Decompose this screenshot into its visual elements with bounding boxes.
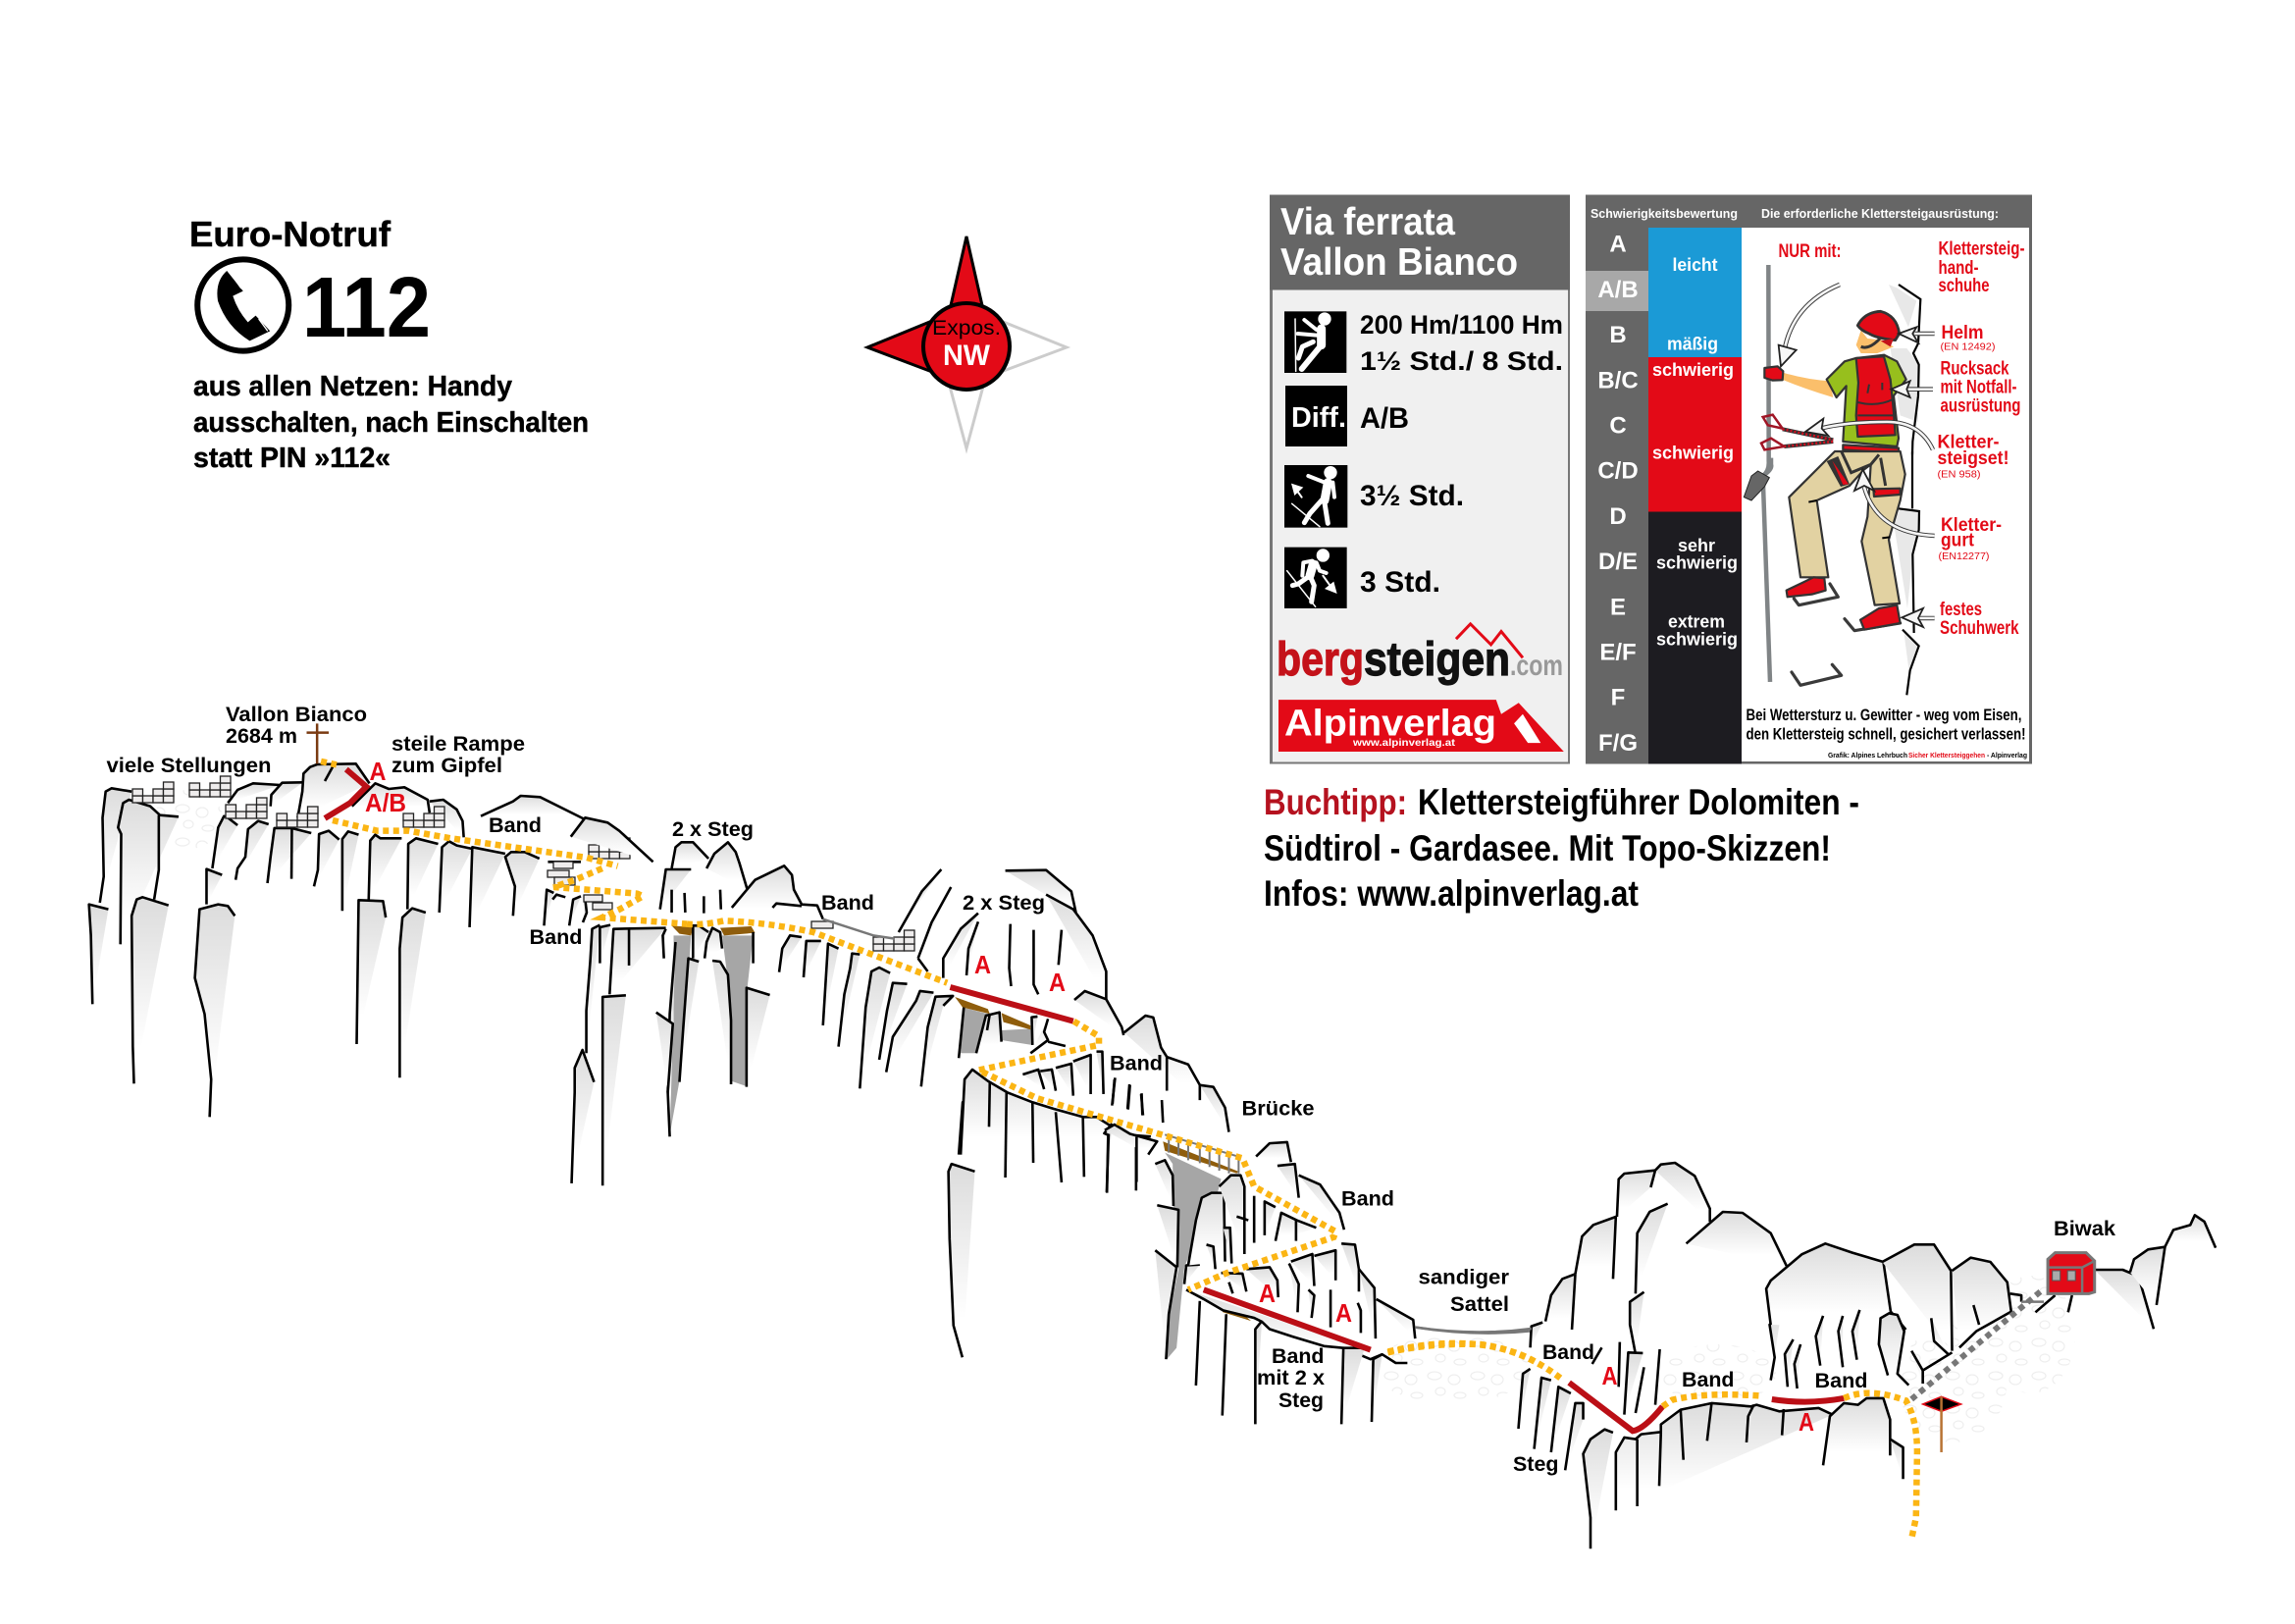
equipment labels: gurt bbox=[1941, 531, 1975, 551]
equipment labels: (EN 958) bbox=[1937, 470, 1980, 481]
safety note bbox=[1747, 706, 2025, 743]
difficulty band labels: mäßig bbox=[1667, 334, 1718, 353]
icon: telephone bbox=[197, 259, 288, 351]
panel title: Vallon Bianco bbox=[1280, 241, 1518, 284]
route labels: Band bbox=[489, 814, 542, 837]
grade letters: F/G bbox=[1598, 730, 1638, 757]
approach time: 3½ Std. bbox=[1360, 480, 1464, 512]
rock outlines bbox=[1519, 1163, 2216, 1548]
grade letters: A/B bbox=[1597, 277, 1639, 303]
summit cross bbox=[306, 723, 329, 763]
difficulty markers on route: A bbox=[1799, 1407, 1814, 1437]
book tip: Buchtipp: bbox=[1264, 782, 1407, 822]
icon: ascent bbox=[1284, 465, 1347, 528]
equipment labels: ausrüstung bbox=[1941, 396, 2021, 417]
logo: Alpinverlag bbox=[1278, 700, 1564, 752]
difficulty markers on route: A bbox=[369, 757, 387, 786]
route labels bbox=[106, 704, 2115, 1476]
logo: Alpinverlag: www.alpinverlag.at bbox=[1352, 738, 1456, 749]
difficulty markers on route: A bbox=[1049, 968, 1066, 997]
dark chasms bbox=[668, 935, 1032, 1135]
height and time: 1½ Std./ 8 Std. bbox=[1360, 346, 1563, 376]
rock section: 2 x Steg bbox=[571, 817, 1151, 1193]
rock outlines bbox=[571, 817, 1151, 1193]
route labels: Band bbox=[530, 926, 583, 949]
route: dotted approach line bbox=[321, 761, 1917, 1539]
route labels: Band bbox=[1110, 1052, 1163, 1075]
equipment labels: schuhe bbox=[1939, 276, 1990, 296]
saddle line bbox=[1415, 1328, 1530, 1334]
equipment labels bbox=[1778, 239, 2025, 639]
route labels: Steg bbox=[1278, 1389, 1324, 1412]
difficulty markers on route: A/B bbox=[365, 788, 406, 817]
route labels: 2 x Steg bbox=[963, 892, 1045, 915]
grade letters: E/F bbox=[1599, 640, 1637, 665]
via ferrata section A / AB bbox=[325, 769, 366, 818]
route labels: Band bbox=[821, 892, 874, 915]
descent time: 3 Std. bbox=[1360, 566, 1440, 599]
grade letters: B/C bbox=[1597, 367, 1639, 393]
dotted link to the bivouac bbox=[1911, 1288, 2044, 1399]
icon: signpost bbox=[1923, 1396, 1961, 1452]
route labels: 2 x Steg bbox=[672, 818, 754, 841]
rock section: Brücke and Band mit 2 x Steg bbox=[949, 1016, 1530, 1424]
difficulty markers on route: A bbox=[1335, 1298, 1352, 1328]
difficulty band labels: schwierig bbox=[1652, 444, 1734, 463]
equipment labels: mit Notfall- bbox=[1941, 377, 2017, 398]
panel title: Via ferrata bbox=[1280, 201, 1455, 243]
route labels: Band bbox=[1682, 1369, 1735, 1391]
difficulty band labels: sehr bbox=[1678, 536, 1715, 555]
graphic credit: - Alpinverlag bbox=[1987, 753, 2027, 760]
equipment labels: hand- bbox=[1939, 258, 1978, 279]
route labels: Band bbox=[1815, 1370, 1868, 1392]
equipment labels: Schuhwerk bbox=[1940, 618, 2019, 639]
equipment labels: (EN 12492) bbox=[1941, 341, 1996, 353]
route labels: Biwak bbox=[2054, 1218, 2115, 1240]
via ferrata section A bbox=[950, 987, 1073, 1022]
grade letters: A bbox=[1609, 232, 1627, 258]
safety note: Bei Wettersturz u. Gewitter - weg vom Eisen, bbox=[1747, 706, 2021, 724]
logo: Alpinverlag: Alpinverlag bbox=[1284, 703, 1496, 744]
route labels: 2684 m bbox=[226, 725, 297, 748]
equipment labels: (EN12277) bbox=[1939, 551, 1990, 562]
equipment illustration background bbox=[1742, 228, 2029, 761]
book tip: Infos: www.alpinverlag.at bbox=[1264, 873, 1639, 914]
rock outlines bbox=[949, 1016, 1415, 1424]
footbridges bbox=[1216, 1302, 1324, 1345]
via ferrata section A bbox=[1204, 1289, 1371, 1350]
panel: difficulty scale and equipment bbox=[1586, 194, 2032, 763]
compass: exposure NW: Expos. bbox=[932, 317, 1001, 340]
height and time bbox=[1360, 310, 1563, 376]
rock section: Biwak bbox=[1416, 1163, 2216, 1548]
panel title bbox=[1280, 201, 1518, 284]
equipment labels: Kletter- bbox=[1937, 433, 2000, 453]
route labels: mit 2 x bbox=[1257, 1367, 1325, 1389]
logo: bergsteigen.com: berg bbox=[1277, 634, 1364, 686]
instructions: ausschalten, nach Einschalten bbox=[193, 407, 589, 439]
grade letters: D bbox=[1609, 503, 1627, 530]
height and time: 200 Hm/1100 Hm bbox=[1360, 310, 1563, 340]
route labels: zum Gipfel bbox=[391, 755, 502, 777]
illustration: climber upper body bbox=[1761, 265, 1920, 476]
equipment labels: steigset! bbox=[1937, 448, 2009, 469]
icon: climber on ferrata bbox=[1284, 311, 1346, 373]
difficulty band labels: schwierig bbox=[1652, 360, 1734, 380]
panel: route summary bbox=[1270, 194, 1570, 763]
instructions: aus allen Netzen: Handy bbox=[193, 371, 512, 402]
instructions bbox=[193, 371, 589, 474]
highlighted grade A/B bbox=[1586, 271, 1648, 311]
equipment labels: Helm bbox=[1941, 323, 1984, 343]
book tip: Klettersteigführer Dolomiten - bbox=[1418, 782, 1859, 822]
heading: Euro-Notruf: Euro-Notruf bbox=[189, 214, 391, 254]
route labels: Band bbox=[1341, 1187, 1394, 1211]
graphic credit bbox=[1828, 753, 2027, 760]
compass: exposure NW bbox=[867, 236, 1067, 448]
compass: exposure NW: NW bbox=[943, 340, 991, 372]
icon: difficulty bbox=[1285, 386, 1347, 446]
book tip: Südtirol - Gardasee. Mit Topo-Skizzen! bbox=[1264, 828, 1831, 868]
rock section: summit ridge bbox=[89, 763, 587, 1117]
graphic credit: Sicher Klettersteiggehen bbox=[1908, 753, 1985, 760]
difficulty band labels bbox=[1652, 255, 1738, 650]
route labels: steile Rampe bbox=[391, 733, 525, 756]
icon: bivouac hut bbox=[2048, 1253, 2095, 1293]
grade letters: C bbox=[1609, 412, 1627, 440]
suspension bridge bbox=[1163, 1134, 1240, 1174]
grade letters: E bbox=[1610, 594, 1626, 620]
equipment labels: NUR mit: bbox=[1778, 241, 1841, 262]
equipment labels: Rucksack bbox=[1941, 358, 2009, 379]
icon: difficulty: Diff. bbox=[1291, 402, 1346, 434]
grade letters: F bbox=[1611, 685, 1625, 711]
route labels: Band bbox=[1272, 1345, 1325, 1368]
header labels bbox=[1591, 206, 1999, 221]
emergency call block bbox=[189, 214, 589, 474]
walls: war positions bbox=[132, 776, 914, 951]
route labels: Brücke bbox=[1242, 1097, 1315, 1121]
logo: bergsteigen.com: steigen bbox=[1364, 634, 1510, 686]
difficulty value: A/B bbox=[1360, 402, 1409, 435]
via ferrata sections bbox=[1569, 1383, 1844, 1431]
chasm under bridge bbox=[1165, 1153, 1222, 1359]
instructions: statt PIN »112« bbox=[193, 443, 391, 474]
rock outlines bbox=[89, 763, 587, 1117]
safety note: den Klettersteig schnell, gesichert verlassen! bbox=[1747, 724, 2025, 743]
band line bbox=[823, 919, 895, 939]
grade letters: C/D bbox=[1597, 458, 1639, 485]
grade letters: D/E bbox=[1598, 549, 1638, 575]
footbridges bbox=[672, 925, 1030, 1029]
grade letters bbox=[1597, 232, 1639, 757]
difficulty markers on route: A bbox=[1601, 1361, 1618, 1390]
route labels: Steg bbox=[1513, 1453, 1558, 1476]
route labels: Band bbox=[1542, 1341, 1594, 1364]
difficulty colour bands bbox=[1648, 228, 1742, 763]
logo: bergsteigen.com bbox=[1277, 624, 1563, 686]
equipment labels: Klettersteig- bbox=[1939, 239, 2025, 260]
difficulty band labels: schwierig bbox=[1656, 630, 1738, 650]
difficulty markers on route: A bbox=[1259, 1279, 1276, 1308]
route labels: Vallon Bianco bbox=[226, 704, 367, 726]
route labels: viele Stellungen bbox=[106, 755, 271, 777]
difficulty markers on route: A bbox=[974, 950, 991, 979]
difficulty band labels: schwierig bbox=[1656, 553, 1738, 573]
equipment labels: Kletter- bbox=[1941, 515, 2002, 536]
difficulty band labels: extrem bbox=[1668, 612, 1725, 632]
sandy scree texture bbox=[154, 790, 2075, 1442]
logo: bergsteigen.com: .com bbox=[1510, 650, 1563, 682]
book tip bbox=[1264, 782, 1859, 914]
saddle line bbox=[1416, 1302, 2044, 1333]
difficulty band labels: leicht bbox=[1672, 255, 1718, 275]
equipment labels: festes bbox=[1940, 600, 1982, 620]
route labels: sandiger bbox=[1419, 1266, 1509, 1289]
emergency number 112: 112 bbox=[302, 260, 431, 355]
icon: descent bbox=[1284, 548, 1347, 608]
illustration: climber legs bbox=[1744, 451, 1919, 695]
header labels: Die erforderliche Klettersteigausrüstung: bbox=[1761, 206, 1999, 221]
header labels: Schwierigkeitsbewertung bbox=[1591, 206, 1738, 221]
graphic credit: Grafik: Alpines Lehrbuch bbox=[1828, 753, 1907, 760]
grade letters: B bbox=[1609, 322, 1627, 348]
difficulty markers on route bbox=[365, 757, 1814, 1437]
arrows to equipment bbox=[1779, 285, 1935, 627]
route labels: Sattel bbox=[1450, 1293, 1509, 1316]
